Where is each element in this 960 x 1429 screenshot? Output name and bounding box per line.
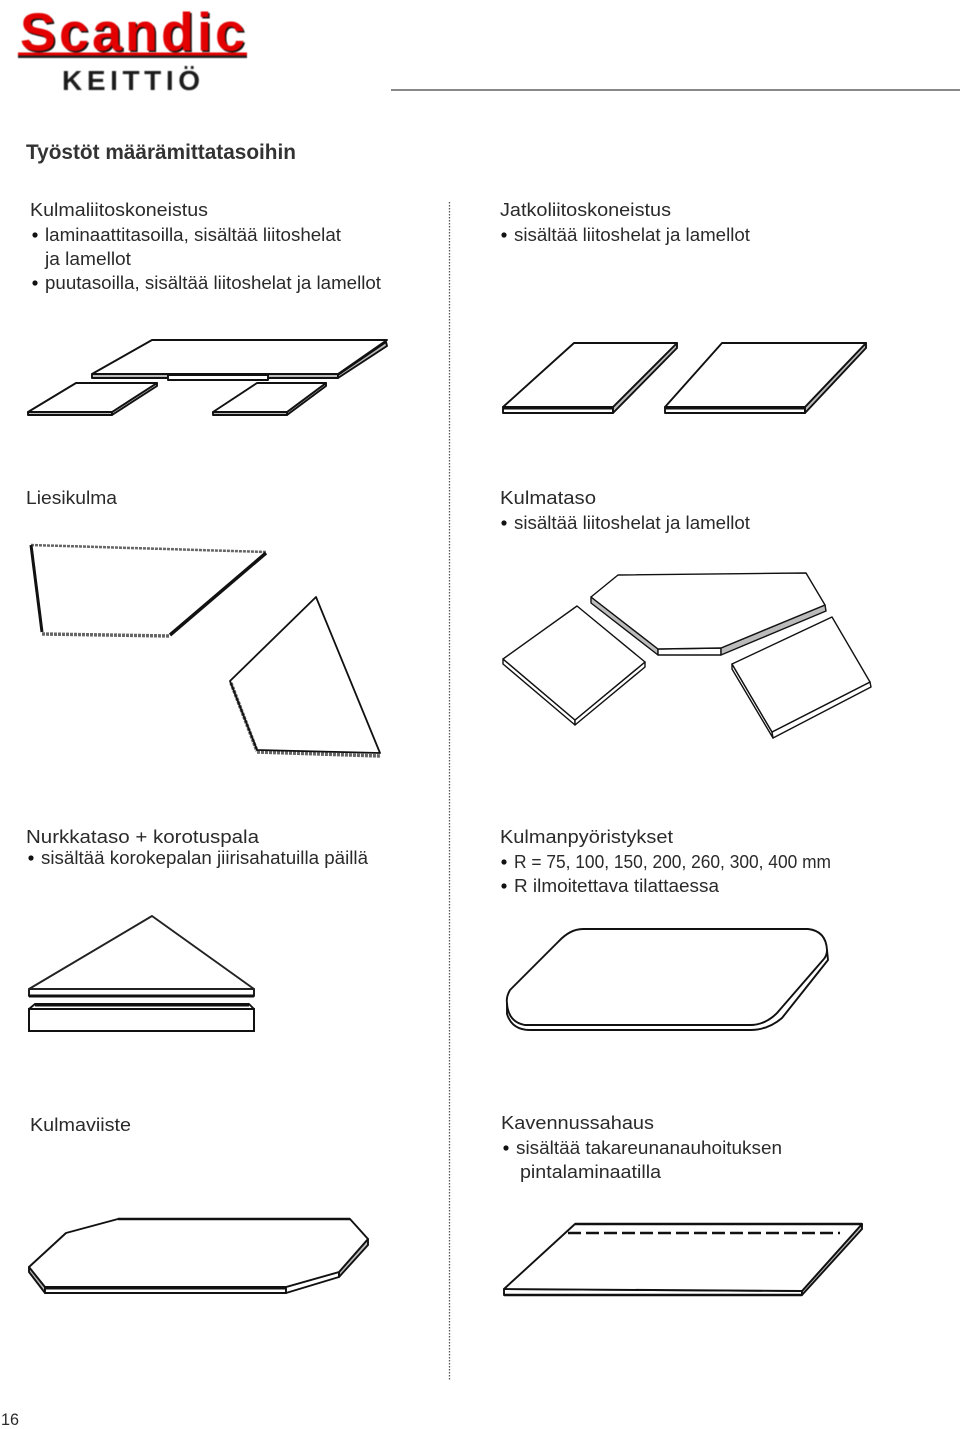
logo: Scandic Keittiö: Scandic [22, 4, 246, 64]
diagram: corner piece and riser [29, 916, 254, 1031]
text block: Kulmataso: sisältää liitoshelat ja lamellot [514, 513, 750, 533]
diagram: bevelled corner worktop [29, 1219, 368, 1293]
text block: Kavennussahaus: sisältää takareunanauhoituksen [516, 1138, 782, 1158]
diagram: corner worktop pieces [503, 573, 871, 738]
text block: Liesikulma: Liesikulma [26, 487, 118, 508]
header rule [391, 89, 960, 91]
text block: Kulmataso [500, 487, 750, 533]
text block: Kulmanpyöristykset [500, 826, 831, 896]
text block: Nurkkataso + korotuspala [26, 826, 369, 868]
diagram: rounded corner worktop [507, 929, 828, 1030]
text block: Kulmanpyöristykset: R ilmoitettava tilattaessa [514, 876, 720, 896]
logo: Scandic Keittiö: KEITTIÖ [62, 65, 200, 96]
text block: Jatkoliitoskoneistus: sisältää liitoshelat ja lamellot [514, 225, 750, 245]
text block: Kulmaviiste: Kulmaviiste [30, 1114, 131, 1135]
text block: Jatkoliitoskoneistus [500, 199, 750, 245]
text block: Kulmaliitoskoneistus: Kulmaliitoskoneistus [30, 199, 208, 220]
text block: Kavennussahaus: pintalaminaatilla [520, 1162, 662, 1182]
text block: Jatkoliitoskoneistus: Jatkoliitoskoneistus [500, 199, 671, 220]
diagram: corner joint worktops [28, 340, 387, 415]
diagram: extension joint worktops [503, 343, 866, 413]
logo: Scandic Keittiö [18, 2, 247, 96]
page number: 16 [1, 1410, 19, 1429]
text block: Kulmaliitoskoneistus: ja lamellot [44, 249, 131, 269]
logo: Scandic Keittiö: Scandic [20, 2, 245, 62]
diagram: narrowing cut worktop [504, 1224, 862, 1295]
column divider [448, 202, 450, 1380]
text block: Kavennussahaus: Kavennussahaus [501, 1112, 654, 1133]
text block: Kulmanpyöristykset: R = 75, 100, 150, 200, 260, 300, 400 mm [514, 852, 831, 872]
text block: Kulmataso: Kulmataso [500, 487, 596, 508]
text block: Kulmaliitoskoneistus: puutasoilla, sisältää liitoshelat ja lamellot [45, 273, 381, 293]
text block: Kavennussahaus [501, 1112, 782, 1182]
text block: Kulmaliitoskoneistus: laminaattitasoilla, sisältää liitoshelat [45, 225, 341, 245]
text block: Nurkkataso + korotuspala: Nurkkataso + korotuspala [26, 826, 260, 847]
text block: Kulmanpyöristykset: Kulmanpyöristykset [500, 826, 673, 847]
text block: Kulmaliitoskoneistus [30, 199, 381, 293]
text block: Nurkkataso + korotuspala: sisältää korokepalan jiirisahatuilla päillä [41, 848, 369, 868]
title: Työstöt määrämittatasoihin [26, 141, 296, 164]
diagram: stove corner pieces [31, 545, 381, 756]
